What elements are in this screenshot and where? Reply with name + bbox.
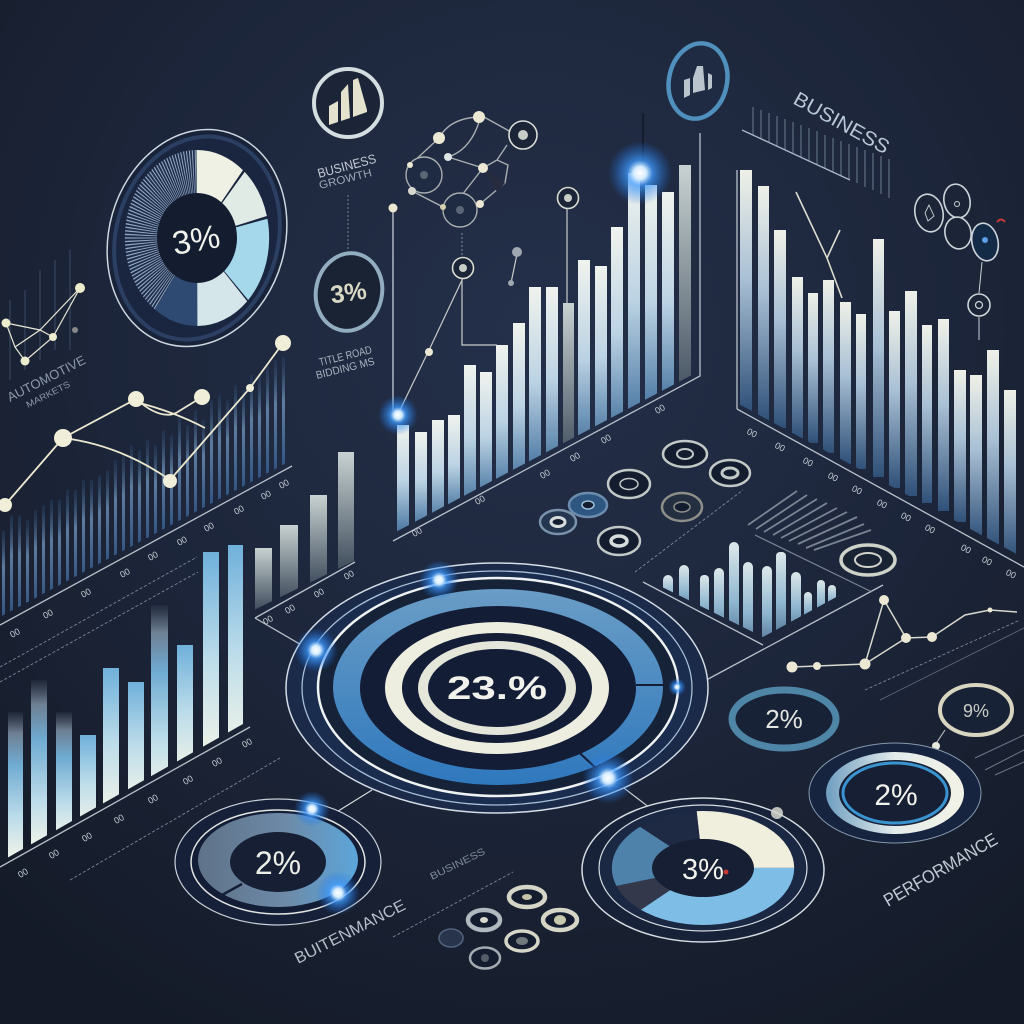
text: metric label [315,344,376,382]
label: 23% main: 23.% [447,670,547,706]
axis ticks: charts: 00 [8,626,22,640]
axis ticks: charts: 00 [210,755,224,769]
glow lights: lower donut [294,791,360,915]
glow lights: main donut [294,560,686,804]
axis ticks: charts: 00 [202,520,216,534]
glow lights: charts [378,141,672,435]
axis ticks: charts: 00 [923,522,937,536]
axis ticks: charts: 00 [240,736,254,750]
axis ticks: charts [8,402,1018,880]
text: performance bottom: BUSINESS [428,846,488,883]
axis ticks: charts: 00 [277,477,291,491]
donut: 2% teal [732,690,836,748]
text: far left label: MARKETS [24,379,72,410]
icon: node cluster right [911,182,1005,340]
text: business label left: BUSINESS [316,151,378,181]
text: metric label: BIDDING MS [315,356,376,382]
axis ticks: charts: 00 [875,497,889,511]
axis ticks: charts: 00 [16,866,30,880]
bar chart: fading grey bars [255,452,354,610]
icon: building badge top [643,38,734,163]
donut: 3% bottom pie [582,798,824,942]
axis ticks: charts: 00 [773,440,787,454]
axis ticks: charts: 00 [410,525,424,539]
axis ticks: charts: 00 [653,402,667,416]
axis ticks: charts: 00 [899,510,913,524]
line chart: upper left [0,335,291,512]
heading: business top right: BUSINESS [790,88,893,159]
donut: 3% bottom pie: 3% [682,854,724,886]
line chart: center rising [388,188,578,414]
axis ticks: charts: 00 [599,432,613,446]
axis ticks: charts: 00 [959,542,973,556]
axis ticks: charts: 00 [980,554,994,568]
donut: 2% bottom left: 2% [255,845,301,881]
panel: floor grid lines [0,133,1024,867]
axis ticks: charts: 00 [826,470,840,484]
icon: network nodes [406,111,537,227]
axis ticks: charts: 00 [41,607,55,621]
bar chart: thin bars upper left [2,357,285,620]
axis ticks: charts: 00 [850,483,864,497]
connector lines [335,785,650,813]
bar chart: lower left [8,545,243,862]
icon: bar chart badge [314,69,382,137]
side notes right [975,735,1024,775]
line chart: far left network [2,250,85,380]
axis ticks: charts: 00 [473,493,487,507]
donut: 2% right [809,743,981,843]
text: metric label: TITLE ROAD [318,344,373,369]
bar chart: right [740,170,1016,557]
axis ticks: charts: 00 [232,503,246,517]
heading: business top right [742,88,893,198]
icon group: small rings center [540,441,750,555]
text: performance bottom [292,846,488,968]
axis ticks: charts: 00 [801,455,815,469]
kpi: 3% ring upper left [309,195,389,337]
pie chart: top left donut [82,108,312,368]
donut: 2% teal: 2% [765,704,803,734]
icon: ring beside striped panel [841,545,895,575]
line chart: lower right [786,595,1024,700]
axis ticks: charts: 00 [259,488,273,502]
axis ticks: charts: 00 [79,586,93,600]
donut: 9% small [932,685,1012,750]
axis ticks: charts: 00 [342,568,356,582]
axis ticks: charts: 00 [745,426,759,440]
axis ticks: charts: 00 [112,812,126,826]
label: 3% top donut: 3% [169,217,223,262]
line chart: over right bars [796,192,842,298]
donut: 2% right: 2% [874,779,918,812]
axis ticks: charts: 00 [312,586,326,600]
panel: dotted guide lines [0,490,1020,937]
axis ticks: charts: 00 [80,830,94,844]
icon group: small rings bottom [439,887,577,968]
bar chart: center [397,165,691,537]
text: far left label: AUTOMOTIVE [5,352,88,405]
text: performance right: PERFORMANCE [880,829,1001,910]
axis ticks: charts: 00 [538,467,552,481]
axis ticks: charts: 00 [47,847,61,861]
donut: 9% small: 9% [963,701,989,721]
axis ticks: charts: 00 [118,566,132,580]
axis ticks: charts: 00 [568,450,582,464]
axis ticks: charts: 00 [175,534,189,548]
axis ticks: charts: 00 [146,792,160,806]
text: business label left: GROWTH [318,167,373,192]
text: performance bottom: BUITENMANCE [292,897,409,968]
axis ticks: charts: 00 [283,602,297,616]
bar chart: small spikes [663,542,836,647]
axis ticks: charts: 00 [1004,567,1018,581]
axis ticks: charts: 00 [261,613,275,627]
donut: 2% bottom left [175,799,381,925]
text: business label left [316,151,378,192]
axis ticks: charts: 00 [181,773,195,787]
axis ticks: charts: 00 [146,549,160,563]
kpi: 3% ring upper left: 3% [329,277,368,309]
donut: main 23% [286,563,708,813]
panel: striped diagonals [748,491,872,592]
